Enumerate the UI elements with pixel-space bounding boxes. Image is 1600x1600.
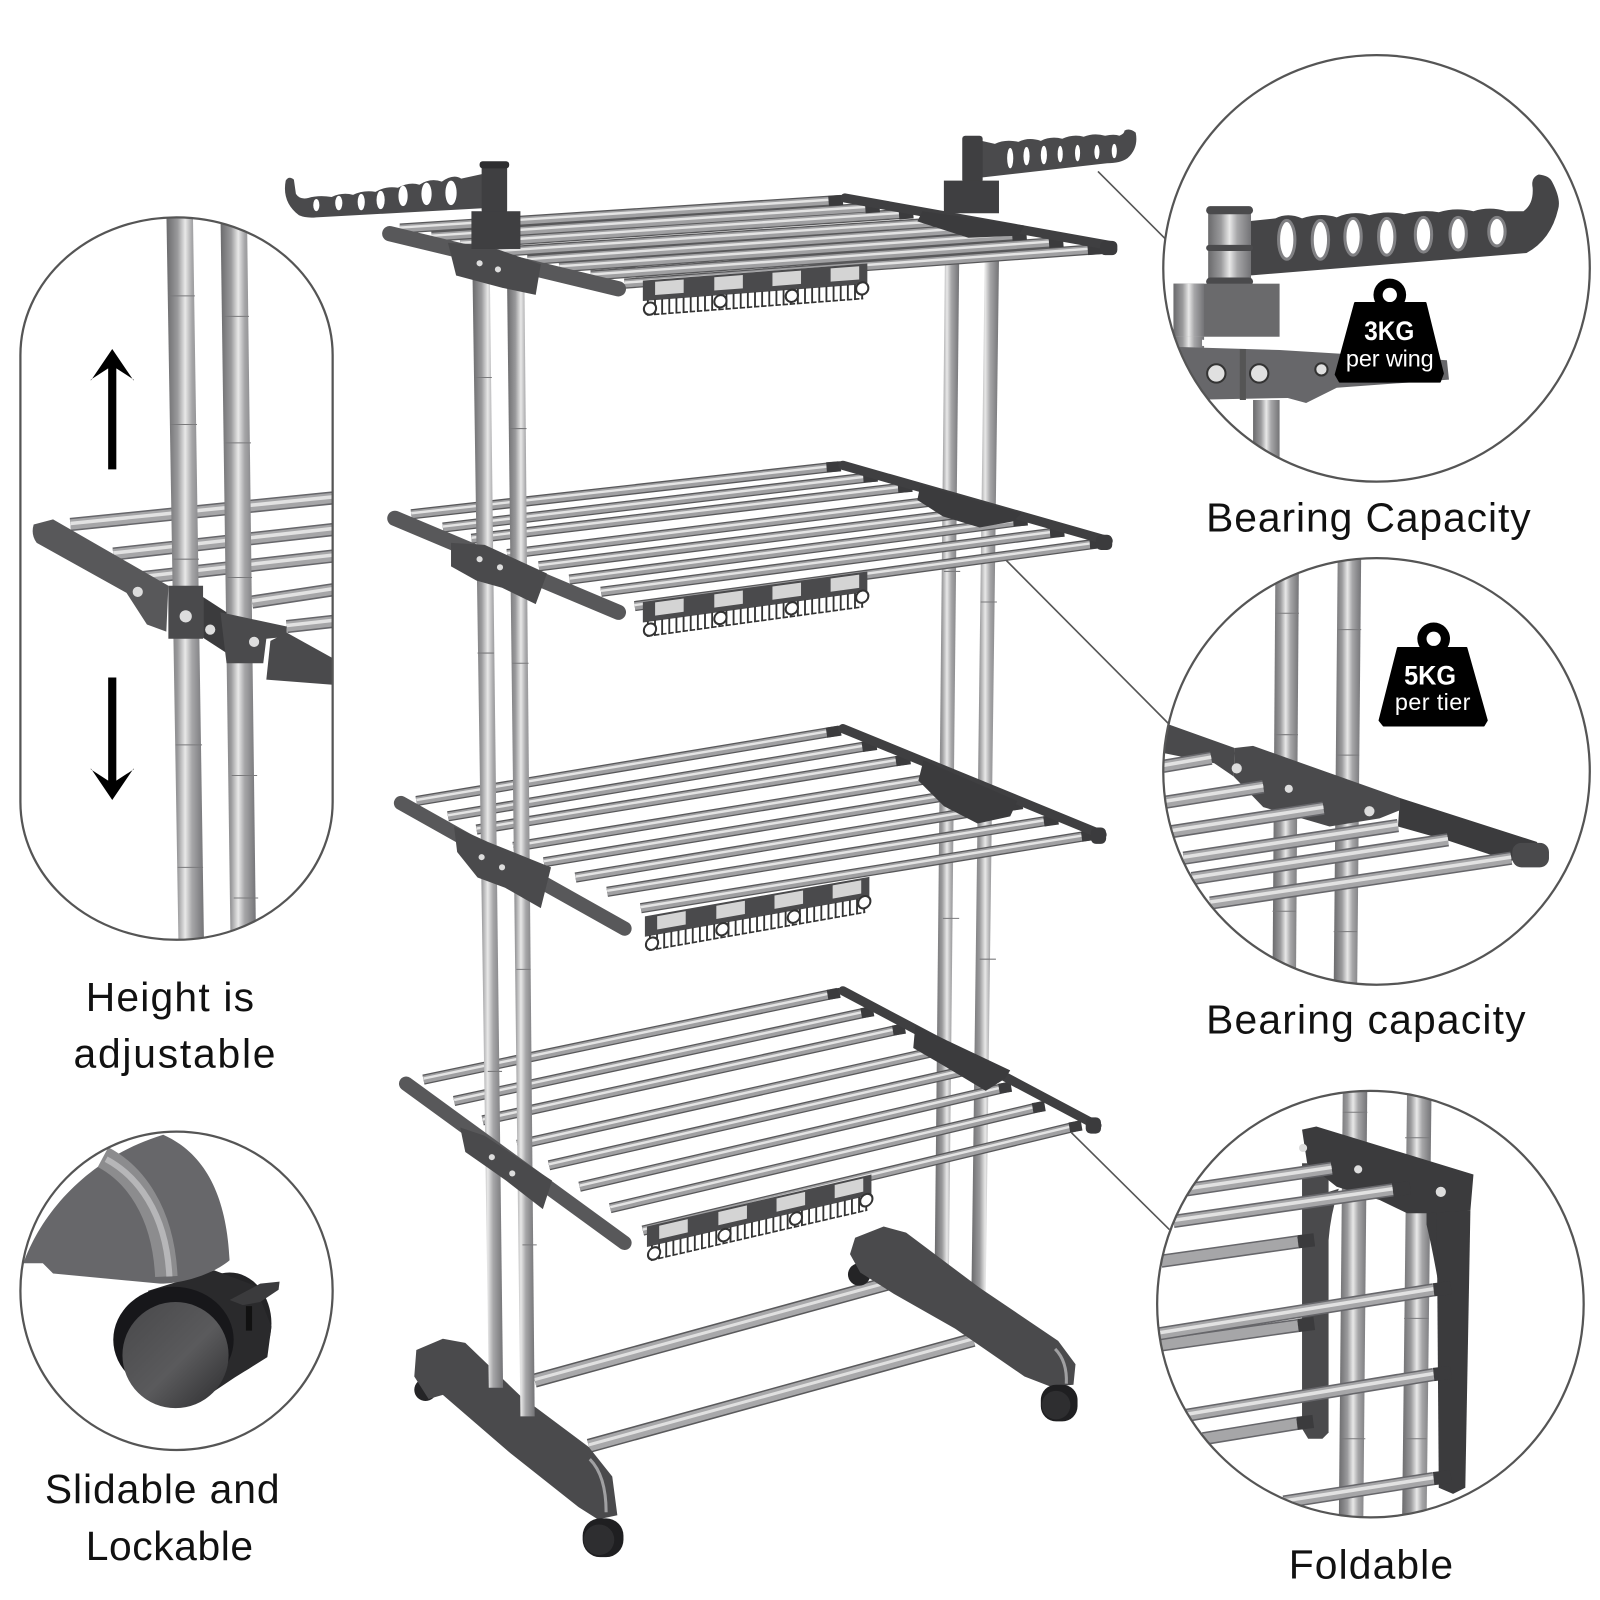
icon: 5KG per tier weight — [1380, 622, 1487, 726]
tier 1 rails — [400, 199, 1102, 284]
tier 3 rails — [416, 730, 1096, 908]
left side frames and hinge brackets — [390, 234, 624, 1243]
caption: height is adjustable: adjustable — [73, 1030, 276, 1076]
panel: tier bearing capacity circle — [1163, 551, 1590, 990]
tier close-up — [1163, 551, 1549, 990]
top right wing arm — [944, 129, 1136, 213]
caption: slidable and lockable — [45, 1466, 280, 1569]
base: right foot with wheels — [848, 1227, 1078, 1421]
pill illustration of poles and tier frame — [33, 209, 333, 949]
panel: wing bearing capacity circle — [1163, 55, 1590, 482]
caption: bearing capacity (tier): Bearing capacity — [1206, 997, 1526, 1043]
icon: 3KG per wing weight: per wing — [1346, 345, 1434, 371]
icon: 3KG per wing weight: 3KG — [1364, 316, 1414, 346]
icon: 3KG per wing weight — [1336, 279, 1443, 382]
panel: caster wheel circle — [20, 1132, 333, 1450]
folded wing close-up — [1160, 1082, 1473, 1526]
panel: height adjustable pill — [20, 209, 333, 949]
icon: 5KG per tier weight: 5KG — [1404, 661, 1456, 691]
front left poles — [472, 270, 537, 1416]
base: left foot with wheels — [414, 1339, 623, 1557]
leader lines from rack to detail circles — [1002, 171, 1169, 1230]
icon: up arrow — [91, 349, 134, 469]
tier 4 rails — [423, 992, 1082, 1231]
peg strip tier 2 — [643, 571, 868, 637]
base: rear and front cross bars — [535, 1282, 973, 1446]
caption: slidable and lockable: Slidable and — [45, 1466, 280, 1512]
peg strip tier 1 — [643, 263, 868, 315]
circle outline — [1163, 55, 1590, 482]
right side frames and brackets — [843, 198, 1117, 1134]
drying rack product illustration — [285, 129, 1136, 1557]
tier 2 rails — [411, 465, 1104, 606]
circle outline — [1163, 558, 1590, 985]
peg strip tier 4 — [647, 1174, 872, 1261]
top left wing arm — [285, 161, 520, 249]
circle outline — [1157, 1091, 1584, 1517]
caption: bearing capacity (wing): Bearing Capacity — [1206, 495, 1531, 541]
peg strip tier 3 — [645, 877, 870, 951]
caption: foldable: Foldable — [1289, 1542, 1453, 1588]
caption: slidable and lockable: Lockable — [86, 1523, 253, 1569]
wheel circle outline — [20, 1132, 333, 1450]
caption: height is adjustable: Height is — [86, 974, 254, 1020]
wing arm close-up — [1173, 174, 1559, 469]
caster wheel illustration — [23, 1135, 280, 1408]
pill outline — [20, 217, 333, 940]
caption: height is adjustable — [73, 974, 276, 1076]
rear right poles — [935, 260, 999, 1293]
icon: down arrow — [91, 678, 134, 800]
panel: foldable circle — [1157, 1082, 1584, 1526]
icon: 5KG per tier weight: per tier — [1395, 689, 1471, 715]
